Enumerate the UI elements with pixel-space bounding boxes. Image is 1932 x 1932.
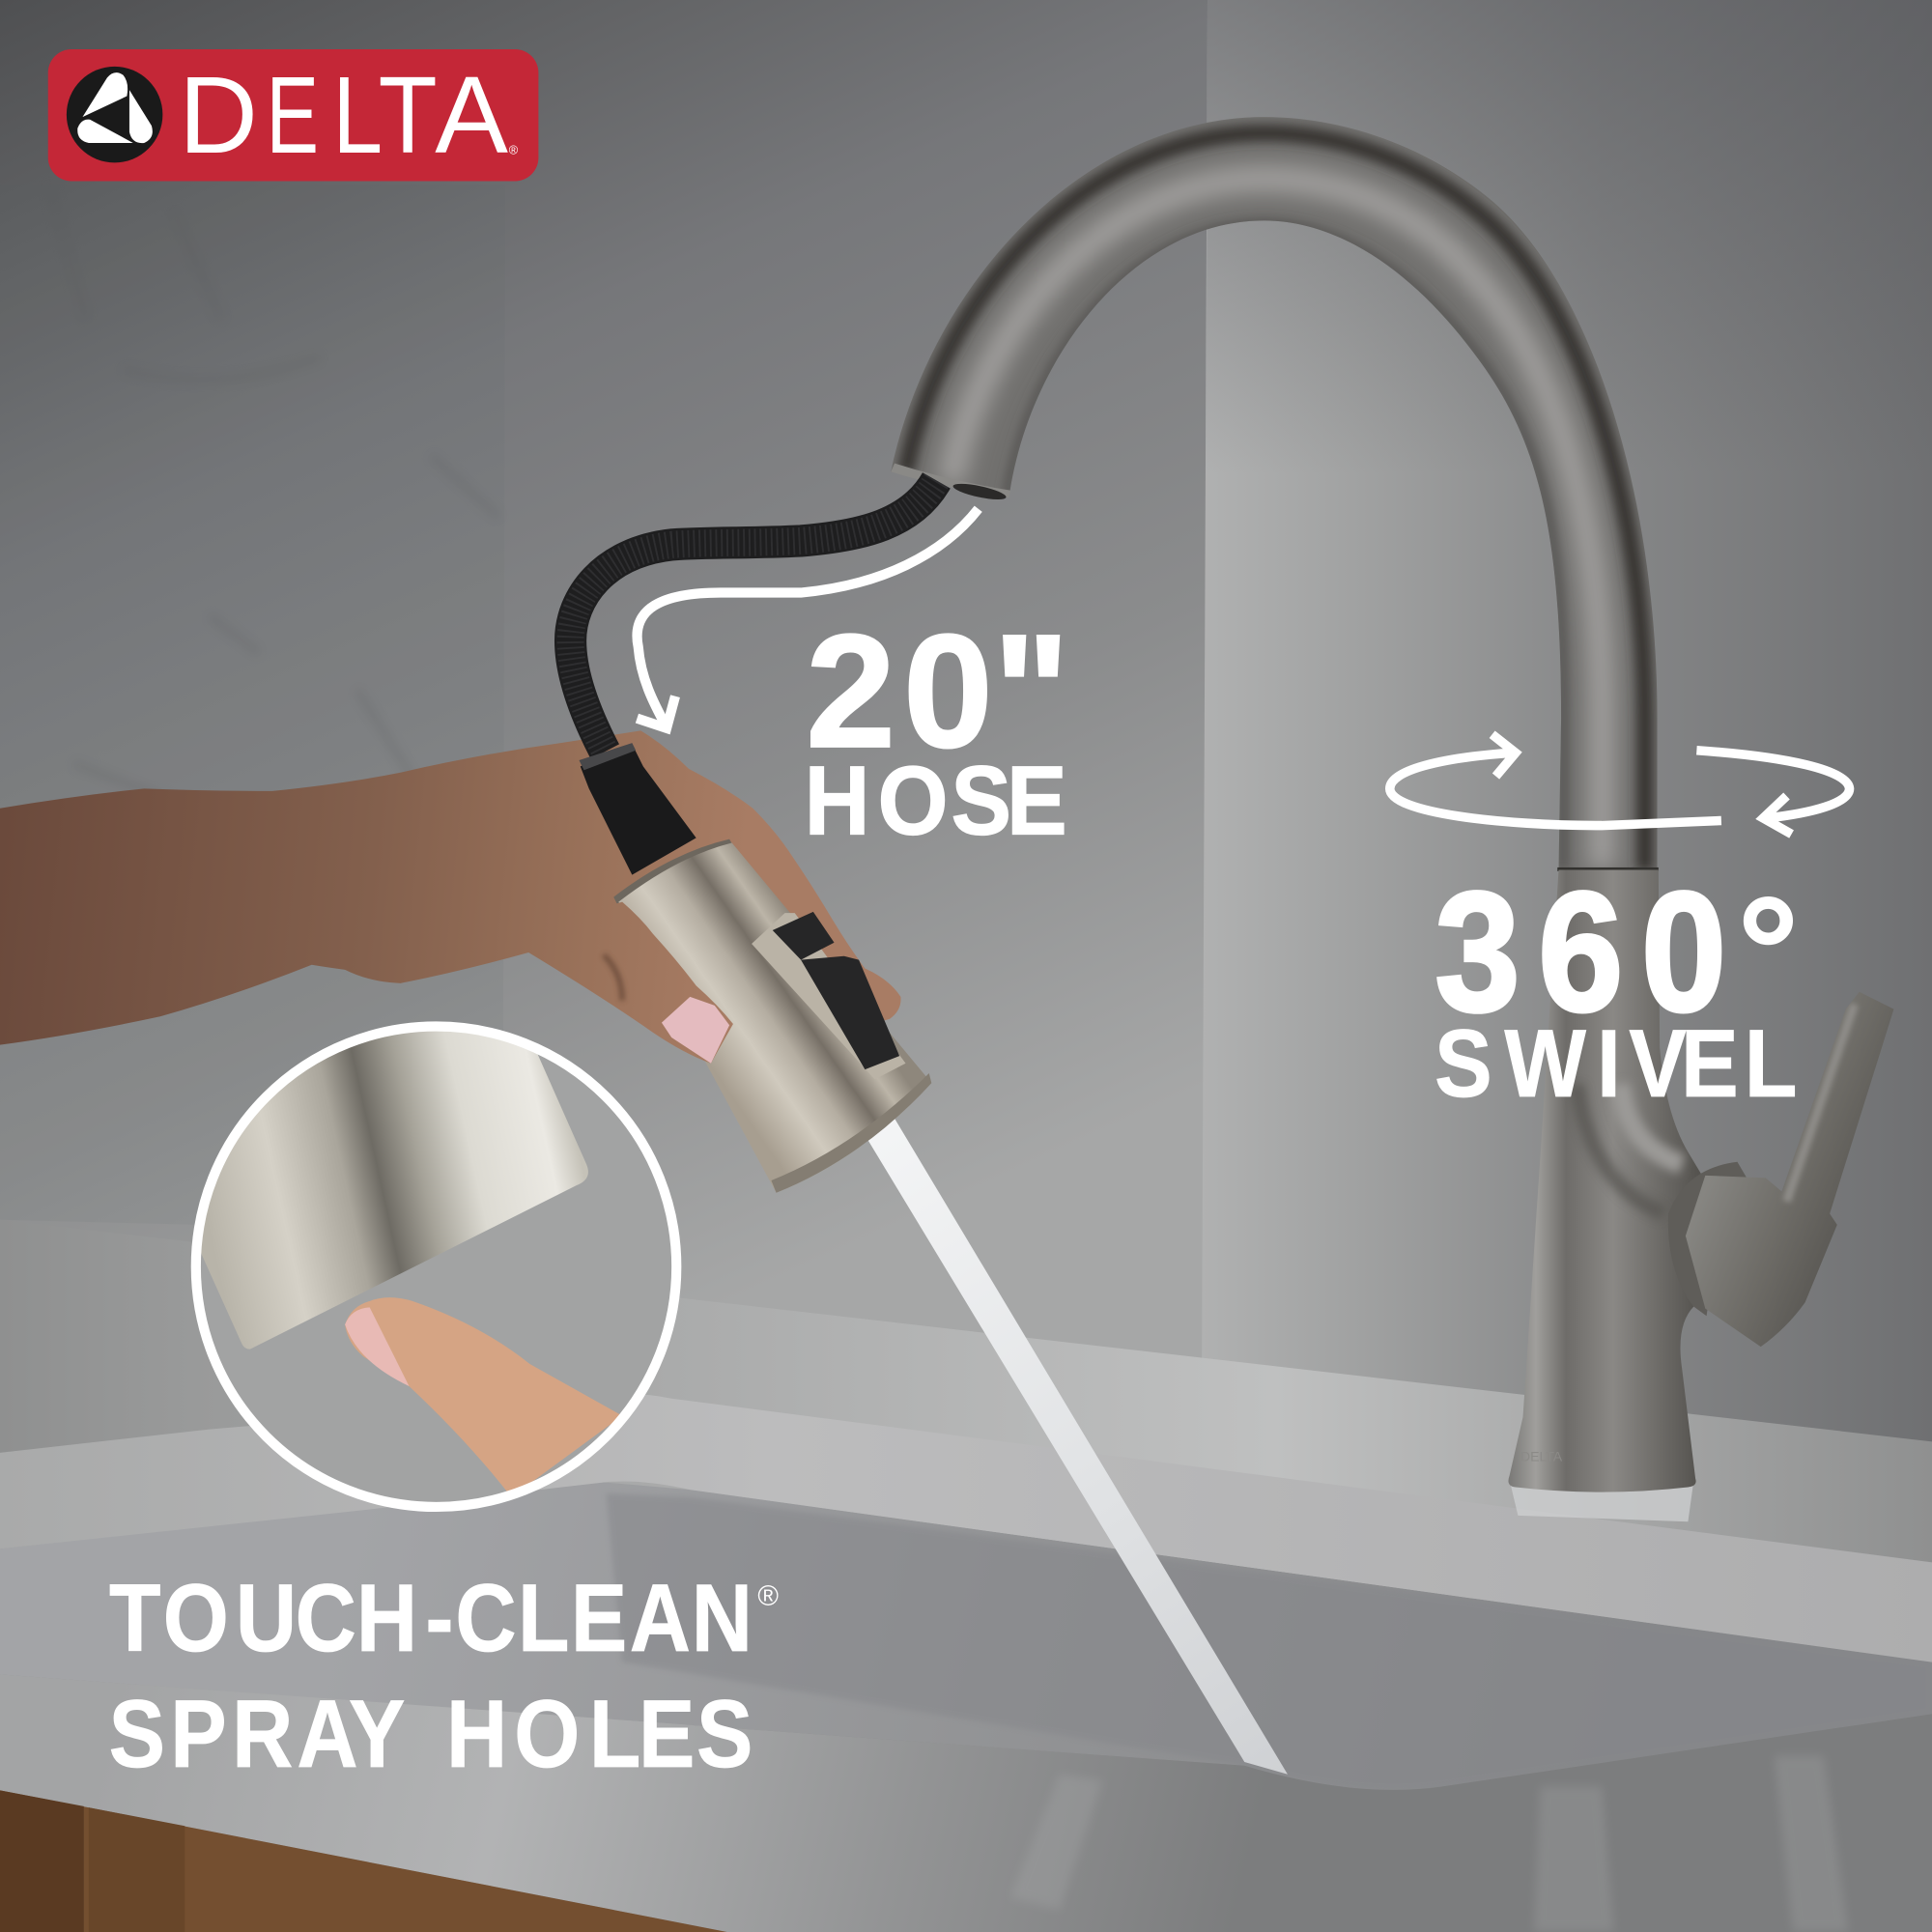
outer dark edge: [906, 133, 1645, 870]
inset ring: [196, 1026, 676, 1507]
L: L: [332, 53, 383, 176]
left arrowhead: [1492, 734, 1516, 777]
SWIVEL word: SWIVEL: [1435, 1010, 1797, 1118]
lever highlight: [1786, 1005, 1855, 1202]
base body: [1508, 870, 1707, 1492]
E: E: [267, 53, 319, 176]
20 inch: 20": [806, 602, 1069, 781]
sink basin: [0, 1482, 1932, 1790]
line two: SPRAY HOLES: [109, 1680, 753, 1787]
marble tint: [0, 185, 505, 1233]
close-up of spray head: [201, 1032, 588, 1349]
spray head: [528, 743, 931, 1193]
A: A: [435, 54, 508, 177]
faucet spout: [891, 117, 1659, 871]
neck curve light: [1620, 1084, 1682, 1164]
hose label: [805, 602, 1069, 855]
inset circle: touch-clean spray holes: [185, 1010, 676, 1507]
inner dark edge: [1007, 223, 1564, 870]
button bezel: [752, 913, 906, 1079]
marble veins: [49, 185, 499, 801]
sink floor shade: [607, 1493, 1932, 1790]
spout opening: [891, 464, 1010, 497]
fingertip nail: [345, 1307, 409, 1386]
wall top shade: [1205, 0, 1932, 863]
faucet base: [1508, 870, 1893, 1521]
inset background: [196, 1026, 676, 1507]
cabinet left board: [0, 1790, 84, 1932]
left arc: [1390, 753, 1721, 826]
lever handle: [1686, 992, 1893, 1347]
HOSE word: HOSE: [805, 746, 1067, 855]
pull-down hose: [571, 480, 936, 752]
degree sign: °: [1737, 866, 1799, 1037]
sink rim: [0, 1394, 1932, 1662]
360 digits: 360: [1435, 857, 1726, 1047]
hose length arrow: [637, 509, 979, 728]
handle hub: [1668, 1162, 1749, 1316]
marble panel: [0, 185, 505, 1233]
neck curve shadow: [1577, 1084, 1663, 1213]
swivel label: [1435, 857, 1799, 1118]
wooden cabinet: [0, 1790, 727, 1932]
thumb: [528, 902, 733, 1064]
hose braid: [571, 480, 936, 752]
head top rim: [613, 839, 734, 914]
connector collar: [579, 743, 636, 770]
counter back deck: [0, 1220, 1932, 1725]
fingernail: [662, 997, 729, 1064]
D: D: [179, 54, 258, 177]
sink reflection: [1010, 1756, 1848, 1932]
spout shading: [906, 133, 1645, 870]
petal top: [82, 72, 128, 117]
head bottom edge: [771, 1073, 931, 1193]
logo disc: [67, 67, 162, 162]
highlight: [950, 179, 1602, 870]
base reflection: [1511, 1485, 1693, 1521]
swivel collar line: [1557, 867, 1659, 871]
arrowhead: [637, 696, 675, 728]
fingertip: [345, 1297, 622, 1497]
T: T: [379, 53, 438, 177]
head body: [618, 842, 931, 1193]
water stream: [863, 1117, 1288, 1775]
arm and hand: [0, 730, 901, 1047]
base logo mark: DELTA: [1520, 1449, 1563, 1464]
right arrowhead: [1763, 796, 1792, 835]
spout body: [891, 117, 1658, 870]
cabinet middle board: [89, 1807, 185, 1932]
black toggle button: [773, 912, 899, 1069]
front counter: [0, 1674, 1932, 1932]
Delta logo badge: [48, 49, 538, 181]
badge: [48, 49, 538, 181]
registered mark: ®: [757, 1580, 779, 1612]
spout bore: [952, 480, 1008, 502]
inset content: [185, 1010, 622, 1497]
swivel arrows: [1390, 734, 1850, 835]
left wall: [0, 0, 1210, 1479]
hose connector: [581, 744, 696, 875]
right arc: [1696, 751, 1850, 818]
touch-clean label: [109, 1564, 779, 1787]
hose body: [571, 480, 936, 752]
petal right: [129, 90, 153, 143]
lower rocker: [801, 956, 899, 1069]
upper rocker: [773, 912, 835, 960]
right wall panel: [1202, 0, 1932, 1479]
neck shading: [1577, 1084, 1682, 1213]
cabinet front: [0, 1790, 727, 1932]
logo wordmark: [179, 53, 508, 177]
curve: [638, 509, 979, 727]
logo triangle petals: [77, 72, 153, 143]
thumb crease: [604, 955, 622, 1001]
registered mark: ®: [509, 142, 519, 156]
petal left: [77, 120, 133, 143]
line one: TOUCH-CLEAN: [109, 1564, 753, 1671]
